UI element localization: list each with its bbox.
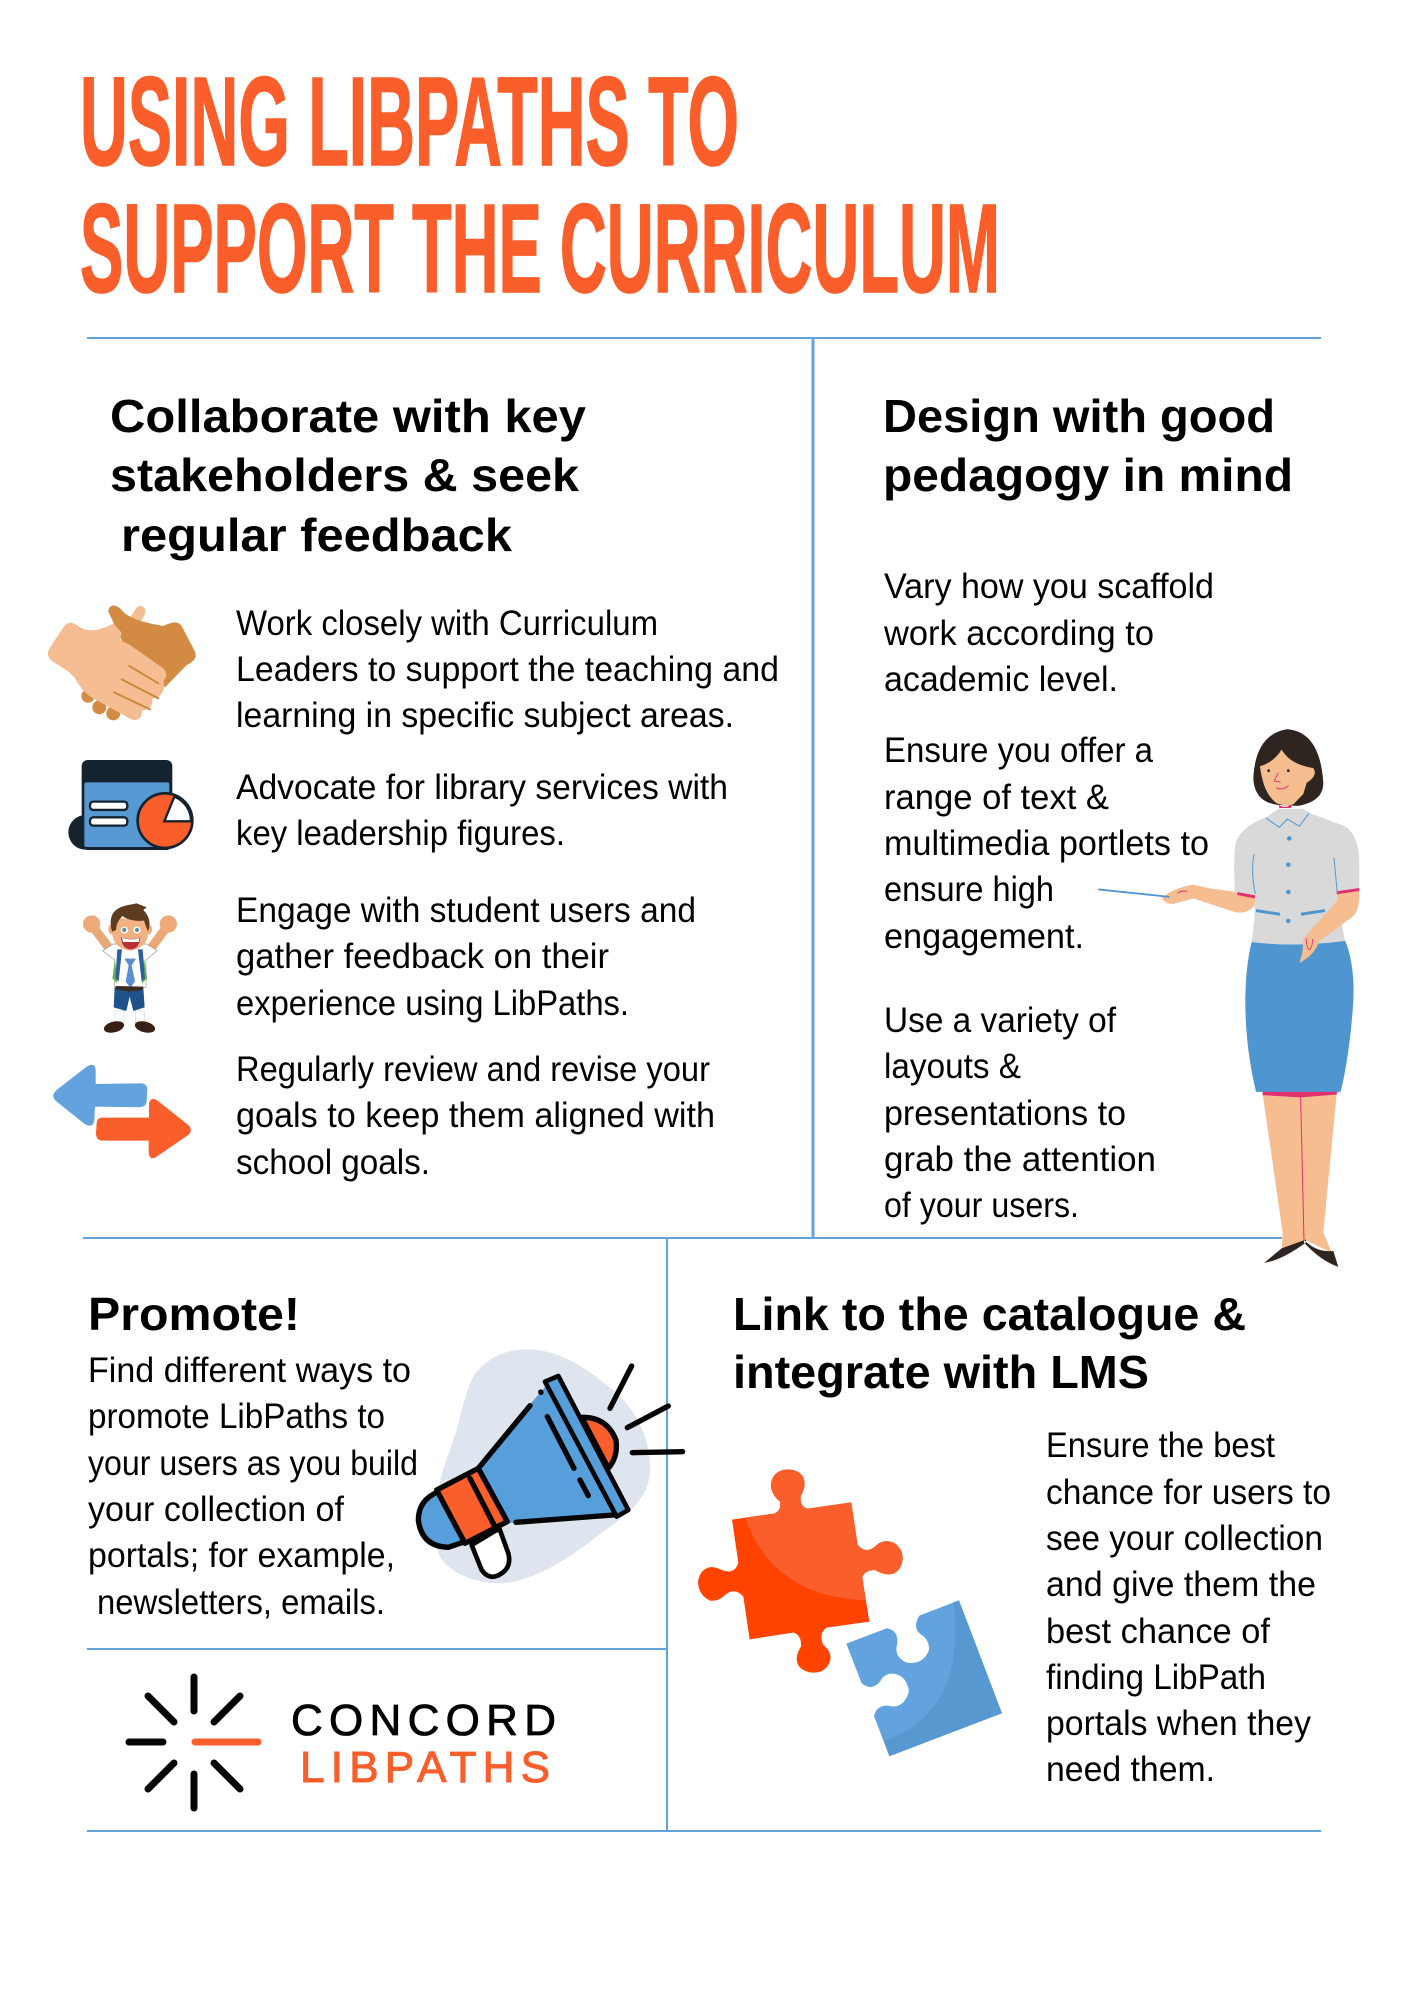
text: portlets: range of text &	[884, 778, 1109, 817]
text: portlets: engagement.	[884, 917, 1084, 956]
text: scaffold: academic level.	[884, 660, 1118, 699]
heading: collaborate: regular feedback	[121, 509, 512, 561]
illustration: teacher with pointer	[1098, 729, 1359, 1267]
heading: pedagogy	[883, 390, 1293, 501]
text: student feedback: Engage with student users and	[236, 891, 696, 930]
text: leadership: key leadership figures.	[236, 814, 565, 853]
text: review goals: school goals.	[236, 1143, 430, 1182]
text: review goals: goals to keep them aligned with	[236, 1096, 715, 1135]
icon: handshake	[48, 605, 196, 720]
text: promote body: Find different ways to	[88, 1351, 411, 1390]
heading: catalogue: integrate with LMS	[733, 1346, 1149, 1398]
text: curriculum leaders: learning in specific subject areas.	[236, 696, 734, 735]
title: USING LIBPATHS TO	[80, 51, 739, 192]
text: portlets: Ensure you offer a	[884, 731, 1153, 770]
text: layouts: of your users.	[884, 1186, 1079, 1225]
text: layouts: grab the attention	[884, 1140, 1156, 1179]
heading: pedagogy: Design with good	[883, 390, 1275, 442]
text: student feedback	[236, 891, 696, 1023]
text: portlets: ensure high	[884, 870, 1054, 909]
text: scaffold: Vary how you scaffold	[884, 567, 1214, 606]
text: review goals: Regularly review and revise your	[236, 1050, 710, 1089]
text: review goals	[236, 1050, 715, 1182]
text: curriculum leaders	[236, 604, 779, 735]
logo mark	[129, 1677, 258, 1808]
text: layouts: Use a variety of	[884, 1001, 1116, 1040]
text: promote body: portals; for example,	[88, 1536, 395, 1575]
text: promote body: your collection of	[88, 1490, 344, 1529]
text: catalogue body: and give them the	[1046, 1565, 1316, 1604]
panel: catalogue and LMS	[698, 1288, 1331, 1789]
heading: collaborate	[110, 390, 586, 561]
text: portlets	[884, 731, 1209, 956]
text: scaffold	[883, 567, 1214, 699]
heading: catalogue: Link to the catalogue &	[733, 1288, 1246, 1340]
panel: promote	[88, 1288, 683, 1622]
text: catalogue body: portals when they	[1046, 1704, 1311, 1743]
text: layouts: presentations to	[884, 1094, 1126, 1133]
heading: promote: Promote!	[88, 1288, 300, 1340]
text: portlets: multimedia portlets to	[884, 824, 1209, 863]
text: catalogue body: finding LibPath	[1046, 1658, 1266, 1697]
text: catalogue body: chance for users to	[1046, 1473, 1331, 1512]
logo wordmark	[291, 1696, 556, 1792]
logo: Concord LibPaths	[129, 1677, 556, 1808]
text: scaffold: work according to	[883, 614, 1154, 653]
title	[80, 51, 1000, 319]
heading: pedagogy: pedagogy in mind	[883, 449, 1293, 501]
panel: collaborate with stakeholders	[48, 390, 779, 1182]
heading: catalogue	[733, 1288, 1246, 1398]
icon: jigsaw pieces	[698, 1469, 1002, 1756]
icon: megaphone	[418, 1349, 683, 1583]
text: student feedback: experience using LibPaths.	[236, 984, 629, 1023]
icon: cheering student	[83, 903, 177, 1035]
panel: good pedagogy	[883, 390, 1359, 1267]
text: promote body: your users as you build	[88, 1444, 418, 1483]
text: curriculum leaders: Work closely with Curriculum	[236, 604, 658, 643]
text: catalogue body	[1046, 1426, 1331, 1789]
logo wordmark: CONCORD	[291, 1696, 556, 1745]
heading: collaborate: stakeholders & seek	[110, 449, 579, 501]
text: promote body: promote LibPaths to	[88, 1397, 385, 1436]
text: leadership: Advocate for library services with	[236, 768, 728, 807]
text: layouts: layouts &	[884, 1047, 1021, 1086]
text: promote body	[88, 1351, 418, 1622]
icon: two-way arrows	[53, 1065, 191, 1158]
text: promote body: newsletters, emails.	[97, 1583, 385, 1622]
text: layouts	[884, 1001, 1156, 1225]
text: catalogue body: see your collection	[1046, 1519, 1323, 1558]
logo wordmark: LIBPATHS	[300, 1743, 550, 1792]
text: leadership	[236, 768, 728, 853]
heading: collaborate: Collaborate with key	[110, 390, 586, 442]
text: catalogue body: need them.	[1046, 1750, 1215, 1789]
text: curriculum leaders: Leaders to support the teaching and	[236, 650, 779, 689]
icon: report with pie chart	[68, 760, 192, 850]
text: catalogue body: Ensure the best	[1046, 1426, 1275, 1465]
text: student feedback: gather feedback on their	[236, 937, 609, 976]
text: catalogue body: best chance of	[1046, 1612, 1270, 1651]
